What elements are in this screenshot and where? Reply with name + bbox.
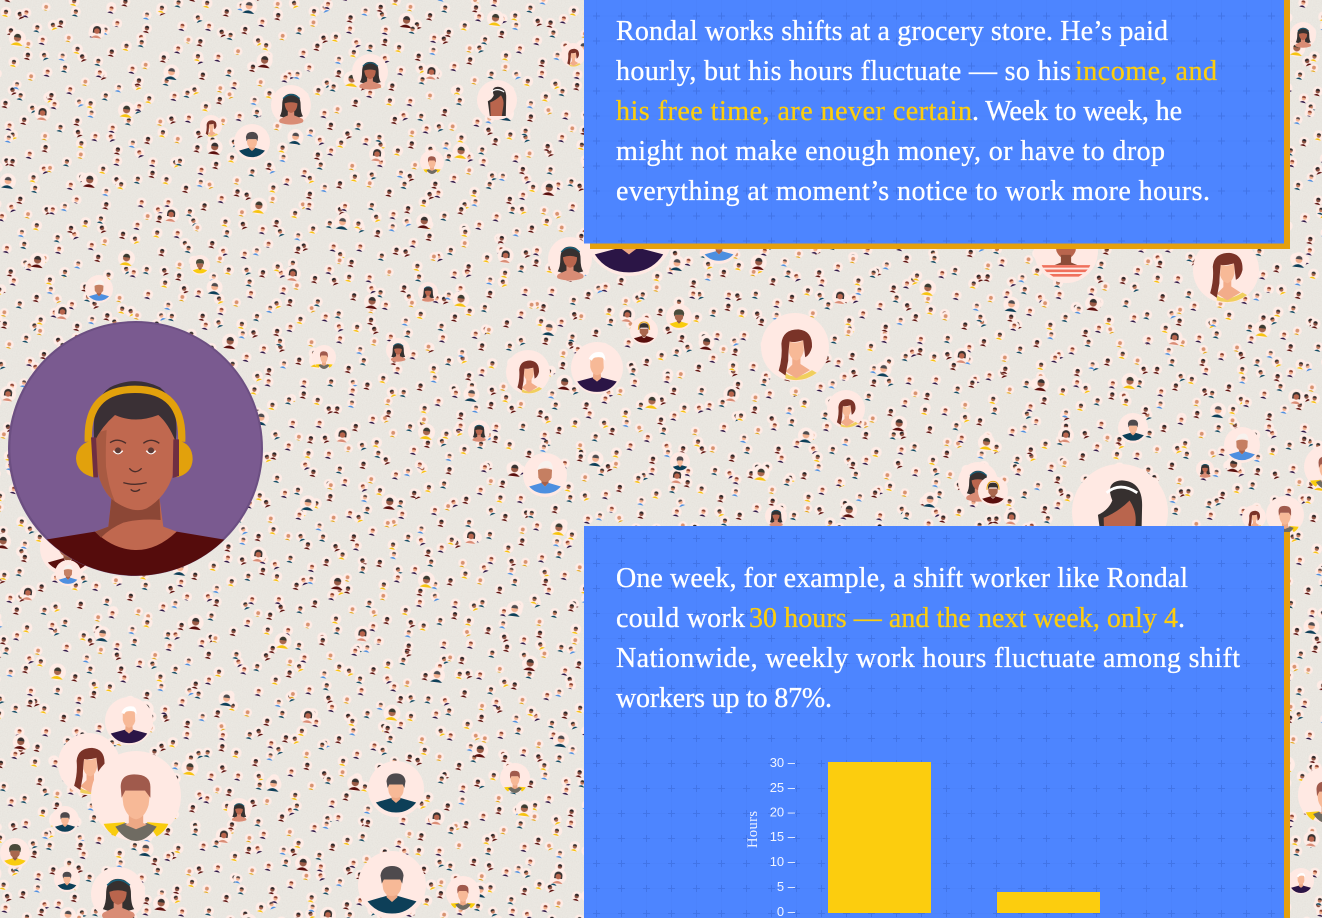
earcup right xyxy=(177,440,193,477)
shirt xyxy=(46,532,224,576)
y axis ticks: 5 – xyxy=(777,879,796,894)
y axis title: Hours xyxy=(745,811,761,848)
bar: 30 hours xyxy=(828,762,931,913)
text: Rondal's shifts: hourly, but his hours fluctuate — so his xyxy=(616,56,1071,87)
nose and mouth xyxy=(123,468,147,491)
portrait: Rondal with headphones xyxy=(8,321,263,600)
text: Rondal's shifts: . Week to week, he xyxy=(972,96,1182,127)
text: Rondal's shifts: Rondal works shifts at a grocery store. He’s paid xyxy=(616,16,1168,47)
text: example week xyxy=(616,563,1240,714)
text: Rondal's shifts: everything at moment’s notice to work more hours. xyxy=(616,176,1210,207)
panel background xyxy=(584,526,1284,918)
bar chart: weekly hours xyxy=(745,755,1100,918)
face shading xyxy=(96,430,114,501)
earcup left xyxy=(76,440,94,477)
bar: 4 hours xyxy=(997,892,1100,913)
text: Rondal's shifts: income, and xyxy=(1075,56,1217,87)
text: example week: could work xyxy=(616,603,745,634)
text: example week: One week, for example, a shift worker like Rondal xyxy=(616,563,1188,594)
ear pads xyxy=(91,437,179,478)
text: example week: 30 hours — and the next week, only 4 xyxy=(749,603,1178,634)
y axis ticks: 15 – xyxy=(770,829,796,844)
hair xyxy=(94,381,176,442)
text: example week: Nationwide, weekly work hours fluctuate among shift xyxy=(616,643,1240,674)
text: Rondal's shifts xyxy=(616,16,1217,207)
face xyxy=(94,410,176,510)
neck xyxy=(95,497,177,550)
y axis ticks: 20 – xyxy=(770,804,796,820)
panel edge xyxy=(1284,532,1290,918)
panel background xyxy=(584,0,1284,244)
text: Rondal's shifts: might not make enough money, or have to drop xyxy=(616,136,1165,167)
y axis ticks: 30 – xyxy=(770,755,796,770)
text: Rondal's shifts: his free time, are never certain xyxy=(616,96,972,127)
panel: Rondal's income uncertainty xyxy=(584,0,1290,249)
text: example week: workers up to 87%. xyxy=(616,683,832,714)
panel: fluctuating weekly hours xyxy=(584,526,1290,918)
eyes xyxy=(113,451,156,454)
brows xyxy=(110,440,159,443)
y axis ticks: 10 – xyxy=(770,854,796,869)
y axis ticks xyxy=(770,755,796,918)
y axis ticks: 25 – xyxy=(770,780,796,795)
panel shadow xyxy=(590,0,1290,249)
text: example week: . xyxy=(1178,603,1185,634)
headband xyxy=(88,389,182,442)
neck shadow xyxy=(95,497,161,538)
